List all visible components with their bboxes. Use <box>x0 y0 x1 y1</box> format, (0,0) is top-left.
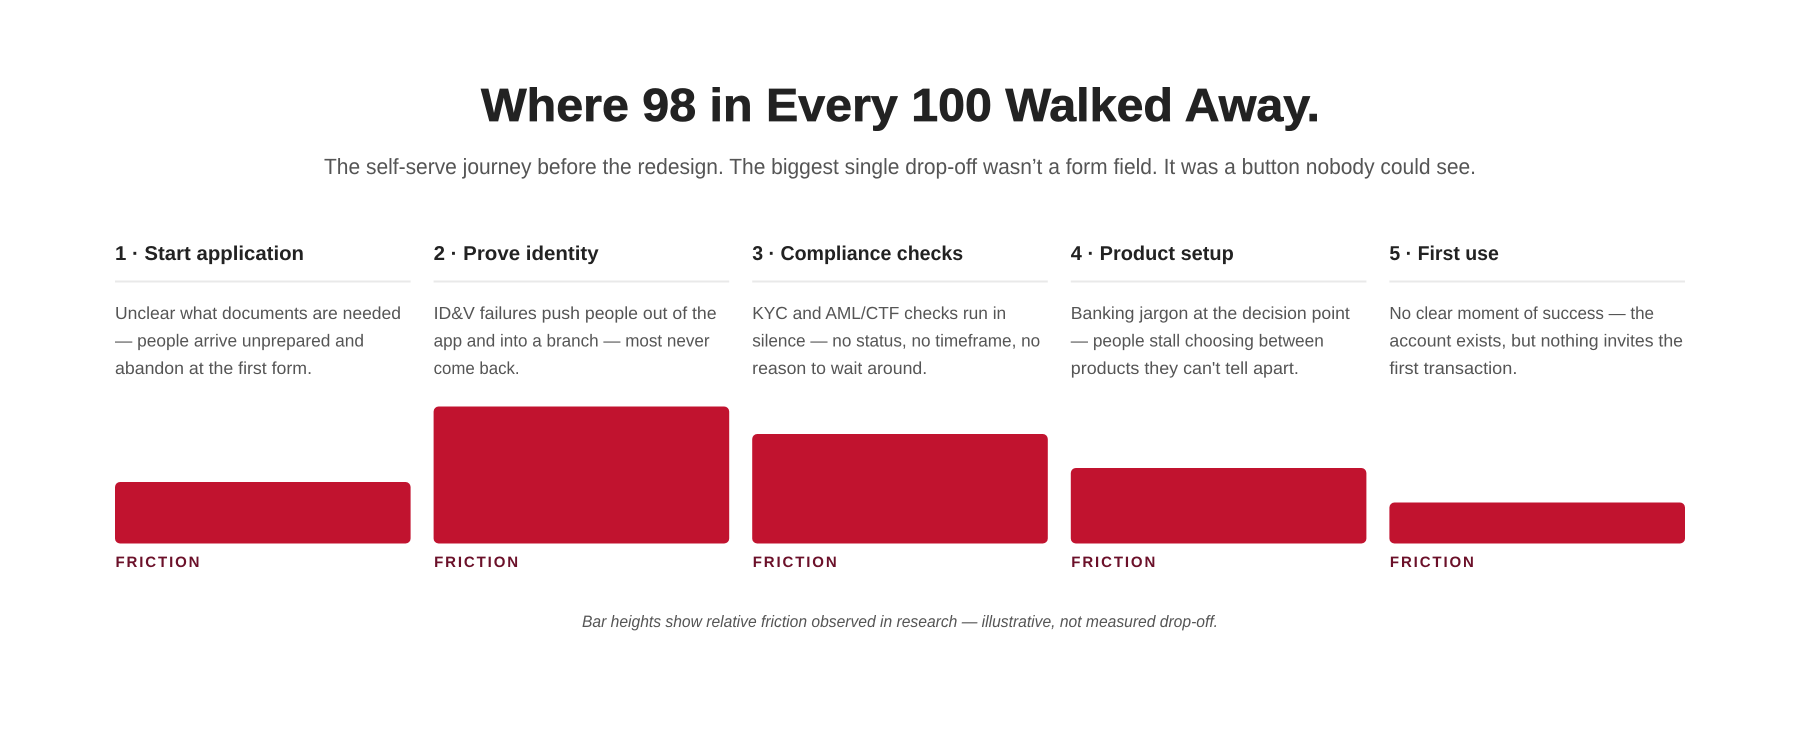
step 5 description: first transaction. <box>1389 358 1517 378</box>
step 1 description: abandon at the first form. <box>115 358 312 378</box>
panel: step 5 first use <box>1389 243 1685 571</box>
step 5 heading: 5 · First use <box>1389 243 1499 265</box>
step 4 description <box>1071 303 1350 378</box>
panel: step 2 prove identity <box>434 243 729 571</box>
step 4 description: products they can't tell apart. <box>1071 358 1299 378</box>
step 2 heading: 2 · Prove identity <box>434 243 599 265</box>
subtitle: The self-serve journey before the redesign. The biggest single drop-off wasn’t a form field. It was a button nobody could see. <box>324 154 1476 179</box>
step 2 description: app and into a branch — most never <box>434 330 710 350</box>
step 1 friction label: FRICTION <box>116 554 200 571</box>
step 2 description: come back. <box>434 358 520 378</box>
step 5 friction label: FRICTION <box>1390 554 1474 571</box>
step 3 heading: 3 · Compliance checks <box>752 243 963 265</box>
step 4 description: — people stall choosing between <box>1071 330 1324 350</box>
step 4 heading: 4 · Product setup <box>1071 243 1234 265</box>
step 2 friction label: FRICTION <box>434 554 518 571</box>
panel: step 3 compliance checks <box>752 243 1048 571</box>
title: Where 98 in Every 100 Walked Away. <box>481 79 1320 131</box>
step 3 description: silence — no status, no timeframe, no <box>752 330 1040 350</box>
step 4 description: Banking jargon at the decision point <box>1071 303 1350 323</box>
step 3 description: KYC and AML/CTF checks run in <box>752 303 1006 323</box>
step 4 friction bar <box>1071 468 1366 544</box>
step 5 description: account exists, but nothing invites the <box>1389 330 1683 350</box>
step 1 friction bar <box>115 482 411 544</box>
step 1 description: Unclear what documents are needed <box>115 303 401 323</box>
step 3 friction label: FRICTION <box>753 554 837 571</box>
panel: step 4 product setup <box>1071 243 1366 571</box>
step 1 description <box>115 303 401 378</box>
panel: step 1 start application <box>115 243 411 571</box>
footnote: Bar heights show relative friction observed in research — illustrative, not measured drop-off. <box>582 613 1218 631</box>
step 4 friction label: FRICTION <box>1071 554 1155 571</box>
step 1 heading: 1 · Start application <box>115 243 304 265</box>
step 2 description: ID&V failures push people out of the <box>434 303 717 323</box>
step 2 description <box>434 303 717 378</box>
step 5 description: No clear moment of success — the <box>1389 303 1654 323</box>
step 3 description: reason to wait around. <box>752 358 927 378</box>
step 5 description <box>1389 303 1683 378</box>
step 5 friction bar <box>1389 502 1685 544</box>
step 1 description: — people arrive unprepared and <box>115 330 364 350</box>
step 3 friction bar <box>752 434 1048 544</box>
step 2 friction bar <box>434 406 729 544</box>
step 3 description <box>752 303 1040 378</box>
